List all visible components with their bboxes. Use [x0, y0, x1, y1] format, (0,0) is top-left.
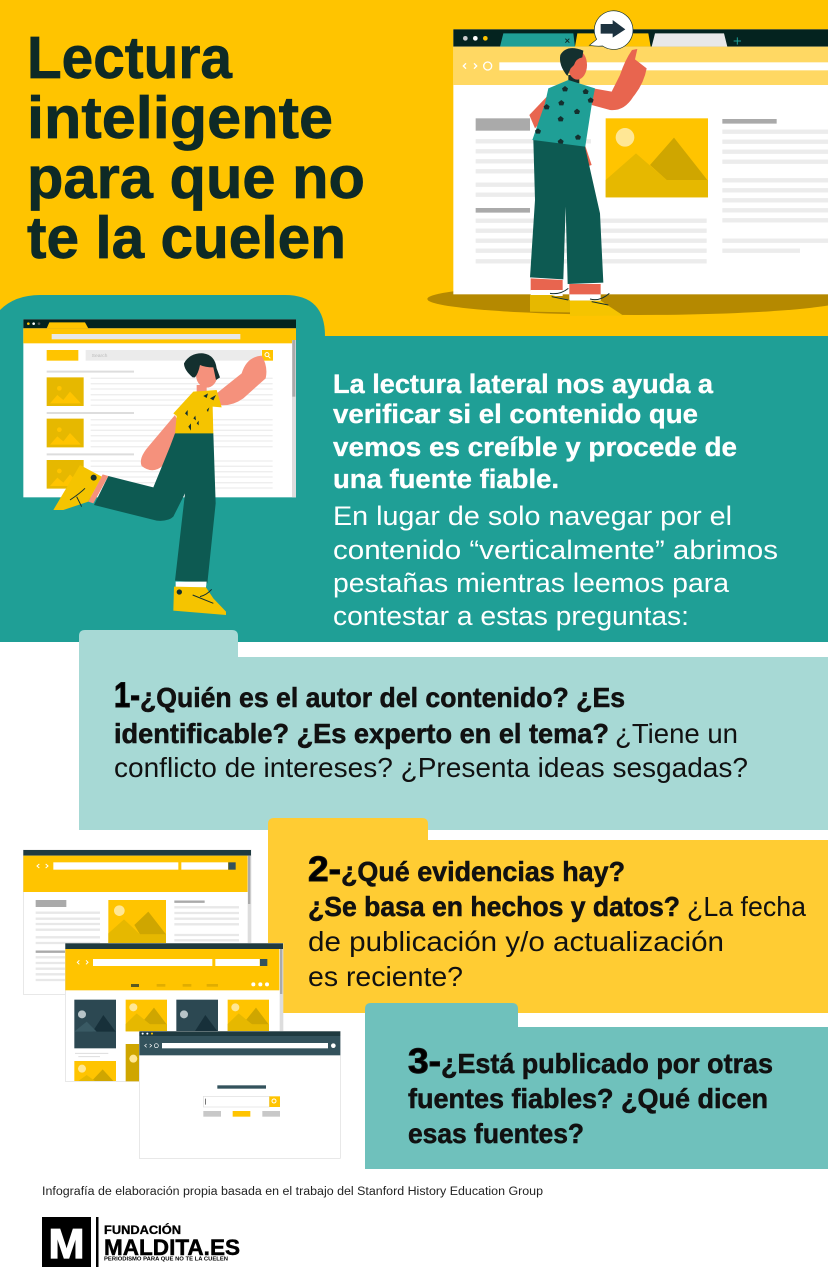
title: Lectura [27, 25, 233, 91]
logo: Fundación Maldita.es: FUNDACIÓN [104, 1224, 181, 1237]
title: te la cuelen [27, 205, 346, 271]
intro bold text: una fuente fiable. [333, 464, 559, 494]
panel: question 2: ¿Se basa en hechos y datos? [308, 891, 680, 922]
panel: question 1 [79, 630, 828, 830]
panel: question 1: ¿Quién es el autor del contenido? ¿Es [140, 682, 625, 713]
browser window 2 [65, 943, 283, 1081]
woman figure [53, 353, 266, 615]
browser window: Search [92, 353, 108, 359]
panel: question 1: ¿Tiene un [615, 718, 738, 749]
intro bold text [333, 369, 737, 494]
intro regular text: contenido “verticalmente” abrimos [333, 535, 778, 565]
intro regular text: pestañas mientras leemos para [333, 568, 730, 598]
intro bold text: verificar si el contenido que [333, 399, 698, 429]
panel: question 2 [268, 818, 828, 1013]
logo: Fundación Maldita.es: PERIODISMO PARA QUE NO TE LA CUELEN [104, 1256, 228, 1262]
shadow [427, 283, 828, 315]
panel: question 3: fuentes fiables? ¿Qué dicen [408, 1083, 768, 1114]
browser window [23, 319, 296, 497]
header background [0, 0, 828, 340]
panel: question 2: de publicación y/o actualización [308, 926, 724, 957]
intro regular text: contestar a estas preguntas: [333, 601, 689, 631]
intro bold text: vemos es creíble y procede de [333, 432, 737, 462]
panel: question 3: esas fuentes? [408, 1118, 584, 1149]
man figure [529, 48, 647, 316]
illustration: man pointing at browser [427, 11, 828, 316]
logo: Fundación Maldita.es [42, 1217, 240, 1267]
source note: Infografía de elaboración propia basada en el trabajo del Stanford History Education Group [42, 1186, 543, 1198]
panel: question 3: ¿Está publicado por otras [441, 1048, 773, 1079]
illustration: stacked browser windows [23, 850, 340, 1158]
panel: question 1: identificable? ¿Es experto en el tema? [114, 718, 609, 749]
panel: question 2: ¿Qué evidencias hay? [341, 856, 625, 887]
browser window 1 [23, 850, 251, 994]
title: inteligente [27, 85, 333, 151]
browser window [453, 29, 828, 294]
illustration: woman with browser [23, 319, 296, 615]
panel: question 1: 1- [114, 676, 140, 715]
title: para que no [27, 145, 365, 211]
panel: lateral reading intro [0, 295, 828, 642]
panel: question 2: es reciente? [308, 961, 463, 992]
panel: question 3 [365, 1003, 828, 1169]
intro bold text: La lectura lateral nos ayuda a [333, 369, 714, 399]
panel: question 2: ¿La fecha [687, 891, 806, 922]
logo: Fundación Maldita.es: MALDITA.ES [104, 1235, 240, 1260]
panel: question 2: 2- [308, 850, 341, 889]
intro regular text: En lugar de solo navegar por el [333, 501, 732, 531]
title [27, 25, 365, 271]
logo: Fundación Maldita.es: M [48, 1220, 84, 1267]
panel: question 1: conflicto de intereses? ¿Presenta ideas sesgadas? [114, 752, 748, 783]
intro regular text [333, 501, 778, 631]
speech bubble with arrow [589, 11, 633, 49]
panel: question 3: 3- [408, 1042, 441, 1081]
browser window 3 [139, 1031, 340, 1158]
